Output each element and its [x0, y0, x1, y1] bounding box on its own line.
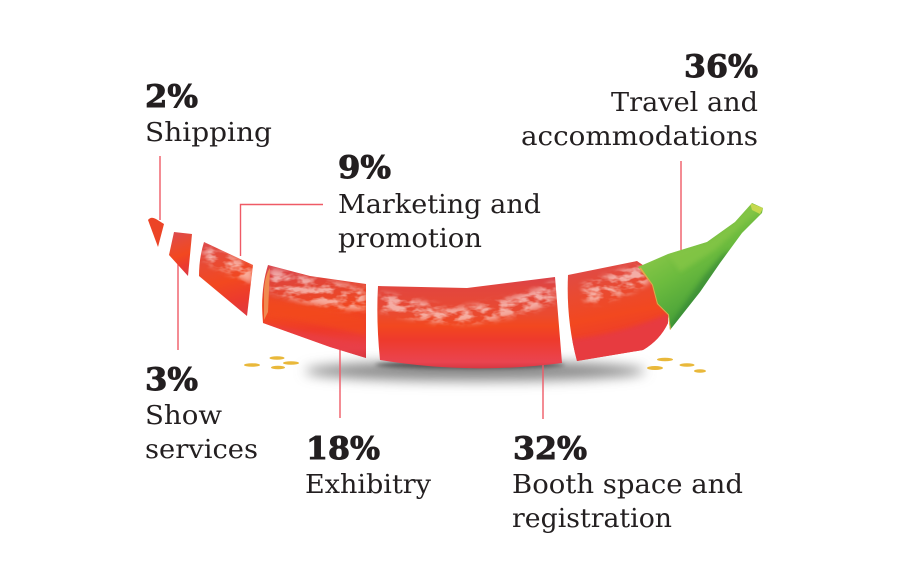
chili slice: 3%: [169, 232, 192, 276]
label: shipping 2%: Shipping: [145, 117, 272, 148]
label: booth space and registration 32%: Booth space and: [512, 469, 743, 500]
green stem: [638, 203, 763, 330]
label: travel and accommodations 36%: Travel and: [611, 87, 758, 118]
chili slice: 36%: [568, 261, 668, 361]
leader line: booth space and registration: [542, 362, 544, 419]
label: show services 3%: [145, 362, 258, 465]
label: show services 3%: services: [145, 434, 258, 465]
label: travel and accommodations 36%: accommodations: [521, 121, 758, 152]
label: marketing and promotion 9%: [338, 150, 541, 254]
seeds right: [647, 358, 706, 373]
label: travel and accommodations 36%: 36%: [684, 49, 758, 85]
label: marketing and promotion 9%: Marketing and: [338, 189, 541, 220]
label: exhibitry 18%: Exhibitry: [305, 469, 431, 500]
chili slice: tip 2%: [148, 218, 164, 247]
chili slice: 32%: [377, 277, 562, 368]
label: shipping 2%: [145, 79, 272, 148]
label: travel and accommodations 36%: [521, 49, 758, 152]
leader line: shipping: [159, 156, 161, 220]
label: exhibitry 18%: 18%: [306, 431, 380, 467]
label: show services 3%: Show: [145, 400, 222, 431]
leader line: exhibitry: [339, 350, 341, 418]
leader line: marketing and promotion: [240, 204, 323, 256]
label: shipping 2%: 2%: [145, 79, 198, 115]
label: marketing and promotion 9%: 9%: [338, 150, 391, 186]
ground shadow: [305, 361, 645, 381]
chili slice: 18%: [262, 265, 366, 358]
leader line: show services: [177, 258, 179, 350]
label: booth space and registration 32%: 32%: [513, 431, 587, 467]
seeds left: [244, 356, 299, 369]
label: exhibitry 18%: [305, 431, 431, 500]
chili slice: 9%: [199, 242, 253, 316]
label: booth space and registration 32%: [512, 431, 743, 534]
chili pepper illustration: [148, 200, 770, 374]
label: booth space and registration 32%: registration: [512, 503, 672, 534]
leader line: travel and accommodations: [680, 161, 682, 250]
label: marketing and promotion 9%: promotion: [338, 223, 482, 254]
label: show services 3%: 3%: [145, 362, 198, 398]
